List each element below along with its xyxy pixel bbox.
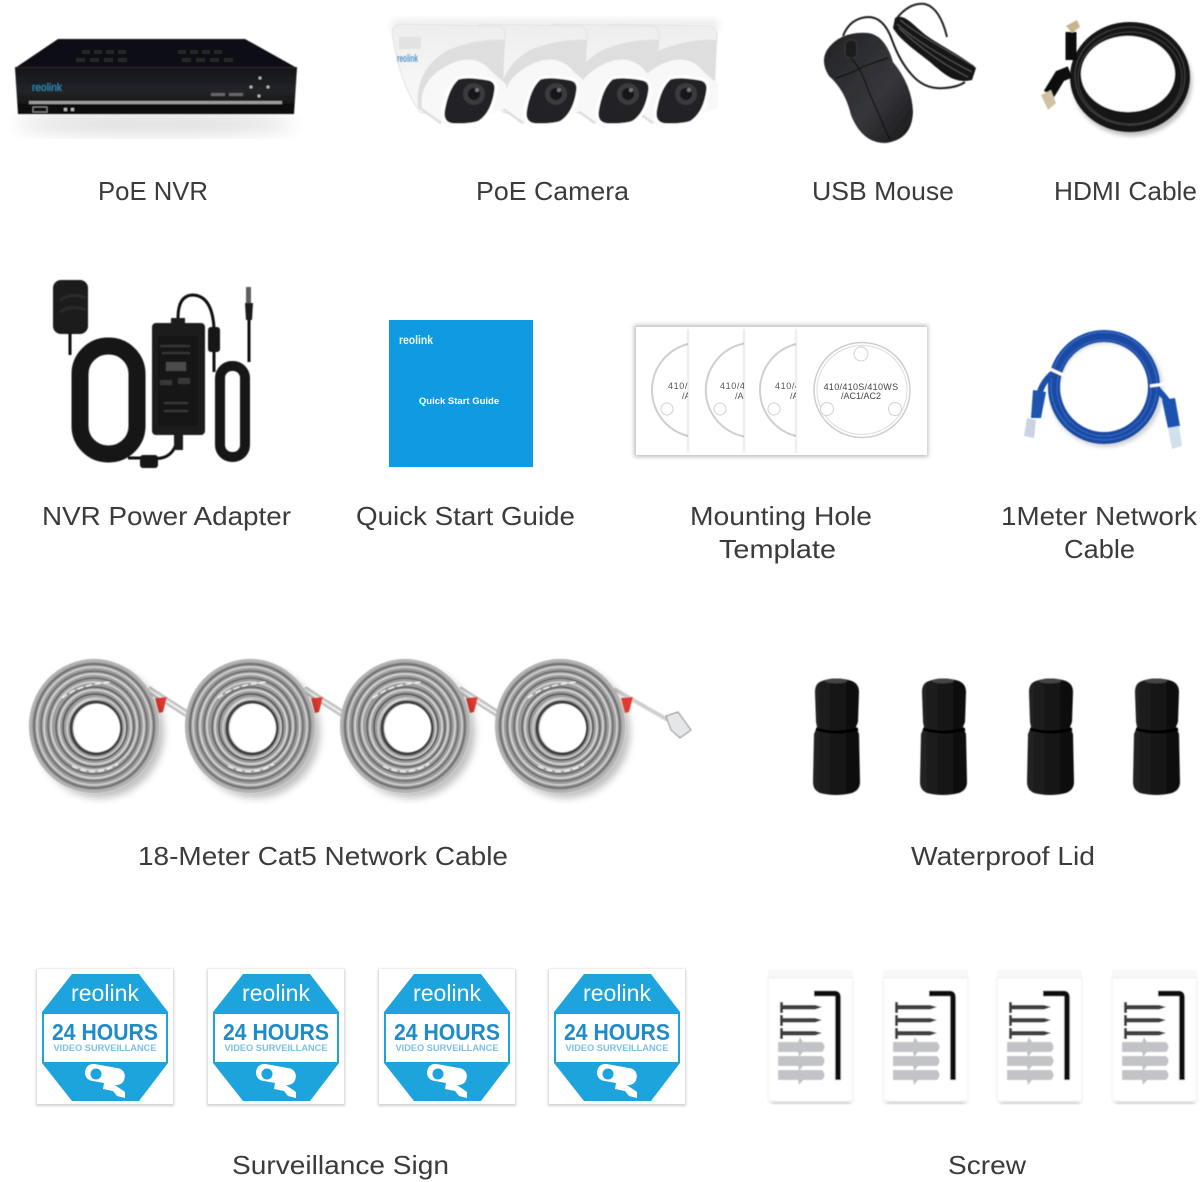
panel: quick start guide booklet <box>389 320 533 467</box>
icon: PoE NVR recorder <box>15 39 297 134</box>
panel: mounting hole template sheets: 410/410S/410WS <box>824 382 898 392</box>
sign 3: 24 HOURS <box>394 1019 500 1045</box>
label: 1Meter Network Cable <box>1001 501 1198 564</box>
label: 18-Meter Cat5 Network Cable: 18-Meter Cat5 Network Cable <box>138 841 508 871</box>
icon: USB mouse <box>824 4 976 143</box>
sign 4: VIDEO SURVEILLANCE <box>566 1043 668 1054</box>
sign 2: 24 HOURS <box>223 1019 329 1045</box>
icon: four PoE dome cameras <box>392 20 718 128</box>
icon: HDMI cable <box>1041 20 1192 136</box>
panel: mounting hole template sheets: /AC1/AC2 <box>841 391 881 401</box>
sign 1 <box>36 969 174 1106</box>
panel: mounting hole template sheets: /A <box>790 391 799 401</box>
label: 1Meter Network Cable: 1Meter Network <box>1001 501 1198 531</box>
sign 3: VIDEO SURVEILLANCE <box>396 1043 498 1054</box>
panel: surveillance signs <box>36 969 686 1106</box>
label: 1Meter Network Cable: Cable <box>1064 534 1135 564</box>
label: Surveillance Sign: Surveillance Sign <box>232 1150 449 1180</box>
sign 3 <box>378 969 516 1106</box>
sign 4: reolink <box>583 980 652 1006</box>
sign 2: reolink <box>242 980 310 1006</box>
sign 1: reolink <box>71 980 140 1006</box>
sign 4: 24 HOURS <box>564 1019 670 1045</box>
label: Mounting Hole Template: Template <box>719 534 836 564</box>
icon: four screw packs <box>768 970 1197 1103</box>
label: NVR Power Adapter: NVR Power Adapter <box>42 501 291 531</box>
panel: mounting hole template sheets: 410/4 <box>720 381 746 391</box>
label: Mounting Hole Template <box>690 501 872 564</box>
icon: 1 meter blue network cable <box>1024 332 1182 449</box>
sign 2 <box>207 969 345 1106</box>
sign 1: VIDEO SURVEILLANCE <box>54 1043 156 1054</box>
panel: mounting hole template sheets: 410/4 <box>668 381 694 391</box>
panel: quick start guide booklet: Quick Start Guide <box>419 396 499 407</box>
icon: NVR power adapter <box>53 280 253 468</box>
label: Mounting Hole Template: Mounting Hole <box>690 501 872 531</box>
icon: four PoE dome cameras: reolink <box>397 53 419 65</box>
sign 3: reolink <box>413 980 482 1006</box>
label: HDMI Cable: HDMI Cable <box>1054 176 1197 206</box>
label: Waterproof Lid: Waterproof Lid <box>911 841 1095 871</box>
icon: PoE NVR recorder: reolink <box>32 82 62 94</box>
panel: quick start guide booklet: reolink <box>399 333 433 347</box>
panel: mounting hole template sheets <box>634 325 928 457</box>
icon: four 18-meter Cat5 cable coils <box>30 660 691 798</box>
sign 1: 24 HOURS <box>52 1019 158 1045</box>
icon: four waterproof lids <box>813 678 1180 795</box>
sign 2: VIDEO SURVEILLANCE <box>224 1043 328 1054</box>
panel: mounting hole template sheets: /A <box>682 391 691 401</box>
label: Quick Start Guide: Quick Start Guide <box>356 501 575 531</box>
label: Screw: Screw <box>948 1150 1026 1180</box>
panel: mounting hole template sheets: 410/4 <box>775 381 801 391</box>
label: PoE NVR: PoE NVR <box>98 176 208 206</box>
panel: mounting hole template sheets: /A <box>735 391 744 401</box>
label: PoE Camera: PoE Camera <box>476 176 630 206</box>
sign 4 <box>548 969 686 1106</box>
label: USB Mouse: USB Mouse <box>812 176 954 206</box>
